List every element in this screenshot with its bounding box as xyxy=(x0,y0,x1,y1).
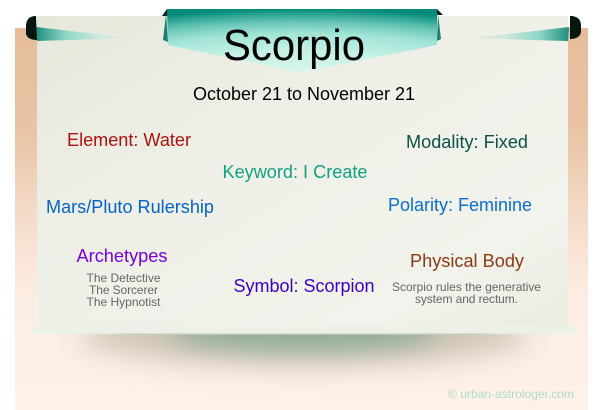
archetypes xyxy=(76,246,168,309)
physical body: system and rectum. xyxy=(415,292,518,306)
title ribbon xyxy=(162,9,443,72)
left corner fold xyxy=(26,16,135,41)
archetypes: The Sorcerer xyxy=(89,283,158,297)
rulership: Mars/Pluto Rulership xyxy=(46,197,214,217)
element: Element: Water xyxy=(67,130,191,150)
date range: October 21 to November 21 xyxy=(193,84,415,104)
archetypes: The Hypnotist xyxy=(86,295,161,309)
physical body: Scorpio rules the generative xyxy=(392,280,541,294)
archetypes: The Detective xyxy=(86,271,161,285)
title: Scorpio xyxy=(223,21,365,70)
keyword: Keyword: I Create xyxy=(222,162,368,182)
physical body: Physical Body xyxy=(410,251,524,271)
drop shadow under paper xyxy=(79,304,529,364)
right corner fold xyxy=(470,16,581,41)
paper sheet xyxy=(30,16,577,335)
symbol: Symbol: Scorpion xyxy=(234,276,374,296)
modality: Modality: Fixed xyxy=(406,132,528,152)
copyright: © urban-astrologer.com xyxy=(448,387,574,401)
archetypes: Archetypes xyxy=(76,246,168,266)
physical body xyxy=(392,251,541,306)
polarity: Polarity: Feminine xyxy=(388,195,532,215)
